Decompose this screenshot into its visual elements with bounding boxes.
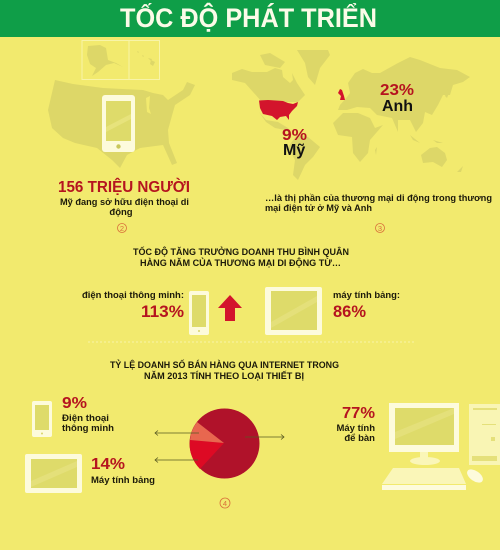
badge 4: 4 <box>223 499 227 508</box>
panel: mobile commerce growth <box>82 246 400 335</box>
stat: desktop 77% <box>336 405 375 444</box>
badge 2 <box>118 224 126 233</box>
arrow: to smartphone <box>155 430 199 436</box>
stat: 156 million: 156 TRIỆU NGƯỜI <box>58 177 190 196</box>
pie chart <box>190 408 260 478</box>
stat: smartphone growth: 113% <box>141 302 184 321</box>
title banner: TỐC ĐỘ PHÁT TRIỂN <box>120 1 377 33</box>
map: United States with inset boxes <box>48 40 195 168</box>
heading: NĂM 2013 TÍNH THEO LOẠI THIẾT BỊ <box>144 371 304 382</box>
description: …là thị phần của thương mại di động trong thương <box>265 193 492 204</box>
stat: desktop 77%: để bàn <box>344 433 375 444</box>
stat: smartphone 9%: 9% <box>62 395 87 412</box>
heading <box>133 246 349 269</box>
description: Mỹ đang sở hữu điện thoại di <box>60 197 189 208</box>
stat: smartphone 9%: thông minh <box>62 423 114 434</box>
stat: 23% UK: 23% <box>380 82 414 99</box>
panel: world market share <box>232 50 492 233</box>
stat: smartphone 9%: Điện thoại <box>62 413 109 424</box>
highlighted United Kingdom <box>338 89 345 100</box>
stat: smartphone growth: điện thoại thông minh: <box>82 290 184 301</box>
heading: HÀNG NĂM CỦA THƯƠNG MẠI DI ĐỘNG TỪ… <box>140 257 341 269</box>
icon: smartphone <box>32 401 52 437</box>
stat: tablet 14% <box>91 456 155 486</box>
icon: tablet <box>265 287 322 335</box>
description: động <box>109 207 133 218</box>
arrow: to desktop <box>245 434 284 440</box>
stat: desktop 77%: 77% <box>342 405 375 422</box>
stat: tablet growth: máy tính bảng: <box>333 290 400 301</box>
stat: tablet growth <box>333 290 400 321</box>
heading: TỶ LỆ DOANH SỐ BÁN HÀNG QUA INTERNET TRONG <box>110 359 339 371</box>
stat: 23% UK <box>380 82 414 115</box>
stat: tablet 14%: Máy tính bảng <box>91 475 155 486</box>
stat: tablet 14%: 14% <box>91 456 125 473</box>
stat: desktop 77%: Máy tính <box>336 423 375 434</box>
badge 3: 3 <box>378 224 382 233</box>
badge 2: 2 <box>120 224 124 233</box>
panel: online sales by device <box>25 359 500 508</box>
highlighted United States <box>259 100 298 120</box>
icon: tablet <box>25 454 82 493</box>
stat: 9% US <box>282 127 307 159</box>
icon: smartphone <box>189 291 209 335</box>
arrow: to tablet <box>155 458 198 462</box>
description <box>60 197 189 218</box>
panel: US mobile owners <box>48 40 195 233</box>
description: mại điện tử ở Mỹ và Anh <box>265 203 372 214</box>
stat: 9% US: Mỹ <box>283 142 305 159</box>
map: world <box>232 50 470 180</box>
badge 4 <box>220 498 230 508</box>
icon: red up arrow <box>218 295 242 321</box>
icon: desktop computer <box>382 403 500 490</box>
heading: TỐC ĐỘ TĂNG TRƯỞNG DOANH THU BÌNH QUÂN <box>133 246 349 258</box>
description <box>265 193 492 214</box>
badge 3 <box>376 224 384 233</box>
icon: smartphone <box>102 95 135 152</box>
stat: tablet growth: 86% <box>333 302 366 321</box>
title banner <box>0 0 500 37</box>
stat: smartphone growth <box>82 290 184 321</box>
heading <box>110 359 339 382</box>
stat: 9% US: 9% <box>282 127 307 144</box>
stat: smartphone 9% <box>62 395 114 434</box>
stat: 23% UK: Anh <box>382 98 413 115</box>
